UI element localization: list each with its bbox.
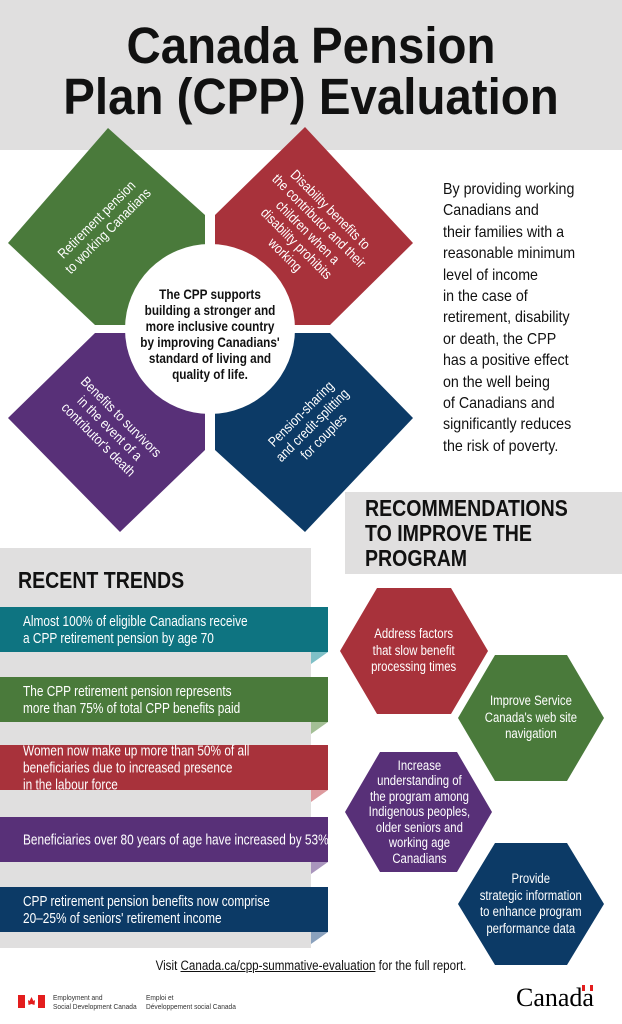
fold triangles <box>311 652 328 944</box>
intro paragraph: By providing working <box>443 181 574 198</box>
department names: Social Development Canada <box>53 1002 137 1011</box>
trend bar 4: Beneficiaries over 80 years of age have increased by 53% <box>23 831 329 848</box>
hexagon: navy <box>458 843 604 965</box>
hex text navy: strategic information <box>480 888 582 902</box>
intro paragraph: reasonable minimum <box>443 245 575 262</box>
intro paragraph: on the well being <box>443 374 550 391</box>
text: Emploi et <box>146 993 174 1002</box>
intro paragraph: in the case of <box>443 288 528 305</box>
hex text navy <box>480 871 582 936</box>
recommendations heading <box>365 495 568 571</box>
center text <box>140 286 280 382</box>
hex text navy: Provide <box>512 871 550 886</box>
footer link text: Visit Canada.ca/cpp-summative-evaluation for the full report. <box>156 958 466 973</box>
intro paragraph: significantly reduces <box>443 416 571 433</box>
diamond text: survivors: Benefits to survivors <box>78 373 165 460</box>
center text: quality of life. <box>172 366 248 382</box>
hex text green <box>485 693 577 741</box>
title: Plan (CPP) Evaluation <box>63 68 559 125</box>
trend bar 1: a CPP retirement pension by age 70 <box>23 630 214 646</box>
title band <box>0 0 622 150</box>
department names: Employment and <box>53 993 103 1002</box>
diamond text: disability: working <box>265 234 306 275</box>
hexagon: green <box>458 655 604 781</box>
hex text purple: older seniors and <box>375 820 462 835</box>
hex text purple: Canadians <box>392 851 446 866</box>
intro paragraph: their families with a <box>443 224 564 241</box>
intro paragraph: or death, the CPP <box>443 331 556 348</box>
trend bar 5 <box>0 887 328 932</box>
diamond text: pension sharing: and credit-splitting <box>272 385 352 465</box>
center text: more inclusive country <box>146 318 274 334</box>
green diamond quadrant <box>8 128 205 325</box>
diamond text: survivors <box>59 373 165 479</box>
hex text navy: performance data <box>487 920 575 936</box>
blue diamond quadrant <box>215 333 413 532</box>
hex text purple: the program among <box>370 789 468 804</box>
trend bar 3 <box>0 745 328 790</box>
center text: standard of living and <box>149 350 271 366</box>
center text: by improving Canadians' <box>140 334 280 350</box>
text: Développement social Canada <box>146 1002 236 1011</box>
intro paragraph: level of income <box>443 267 538 284</box>
hex text purple: Increase <box>397 758 441 773</box>
diamond text: survivors: in the event of a <box>74 392 146 464</box>
diamond text: retirement: Retirement pension <box>54 177 138 261</box>
recent trends heading: RECENT TRENDS <box>18 567 184 593</box>
trend bar 2 <box>0 677 328 722</box>
trend bar 3: Women now make up more than 50% of all <box>23 742 249 759</box>
hexagon: purple <box>345 752 492 872</box>
trend bar 5: 20–25% of seniors' retirement income <box>23 910 222 926</box>
title: Canada Pension <box>126 17 496 74</box>
center text: building a stronger and <box>145 302 275 318</box>
trend bar 4 <box>0 817 328 862</box>
canada wordmark: Canada <box>516 983 594 1012</box>
icon: canada flag <box>18 995 45 1008</box>
hexagon: red <box>340 588 488 714</box>
hex text purple: working age <box>388 835 450 850</box>
diamond text: disability: the contributor and their <box>269 171 369 271</box>
red diamond quadrant <box>215 127 413 325</box>
title <box>63 17 559 125</box>
intro paragraph: the risk of poverty. <box>443 438 558 455</box>
diamond text: pension sharing: for couples <box>297 410 350 463</box>
recommendations header box <box>345 492 622 574</box>
trend bar 3: beneficiaries due to increased presence <box>23 759 232 776</box>
hex text purple <box>368 758 470 866</box>
hex text red: Address factors <box>375 626 453 641</box>
center circle <box>125 244 295 414</box>
hex text green: navigation <box>505 726 557 741</box>
recommendations heading: PROGRAM <box>365 545 467 571</box>
department names <box>53 993 137 1011</box>
diamond text: disability: children when a <box>273 197 343 267</box>
hex text red: processing times <box>371 659 457 674</box>
recommendations heading: RECOMMENDATIONS <box>365 495 568 521</box>
trend bar 2: The CPP retirement pension represents <box>23 682 232 700</box>
hex text red: that slow benefit <box>373 643 455 658</box>
hex text red <box>371 626 457 674</box>
intro paragraph: of Canadians and <box>443 395 555 412</box>
hex text purple: Indigenous peoples, <box>368 804 470 819</box>
diamond text: retirement: to working Canadians <box>62 185 154 277</box>
hex text green: Canada's web site <box>485 710 577 725</box>
center text: The CPP supports <box>159 286 261 302</box>
diamond text: disability: disability prohibits <box>258 204 336 282</box>
recommendations heading: TO IMPROVE THE <box>365 520 532 546</box>
trend bar 2: more than 75% of total CPP benefits paid <box>23 700 240 716</box>
diamond text: disability: Disability benefits to <box>288 166 374 252</box>
intro paragraph: Canadians and <box>443 202 539 219</box>
hex text purple: understanding of <box>377 773 461 788</box>
intro paragraph: retirement, disability <box>443 309 570 326</box>
trend bar 5: CPP retirement pension benefits now comprise <box>23 892 270 910</box>
hex text navy: to enhance program <box>480 904 582 919</box>
hex text green: Improve Service <box>490 693 572 708</box>
trend bar 3: in the labour force <box>23 776 118 793</box>
trend bar 1: Almost 100% of eligible Canadians receive <box>23 612 248 630</box>
intro paragraph <box>443 181 575 455</box>
diamond text: survivors: contributor's death <box>59 399 139 479</box>
intro paragraph: has a positive effect <box>443 352 569 369</box>
trends grey panel <box>0 548 311 948</box>
trend bar 1 <box>0 607 328 652</box>
purple diamond quadrant <box>8 333 205 532</box>
diamond text: pension sharing: Pension-sharing <box>265 378 337 450</box>
